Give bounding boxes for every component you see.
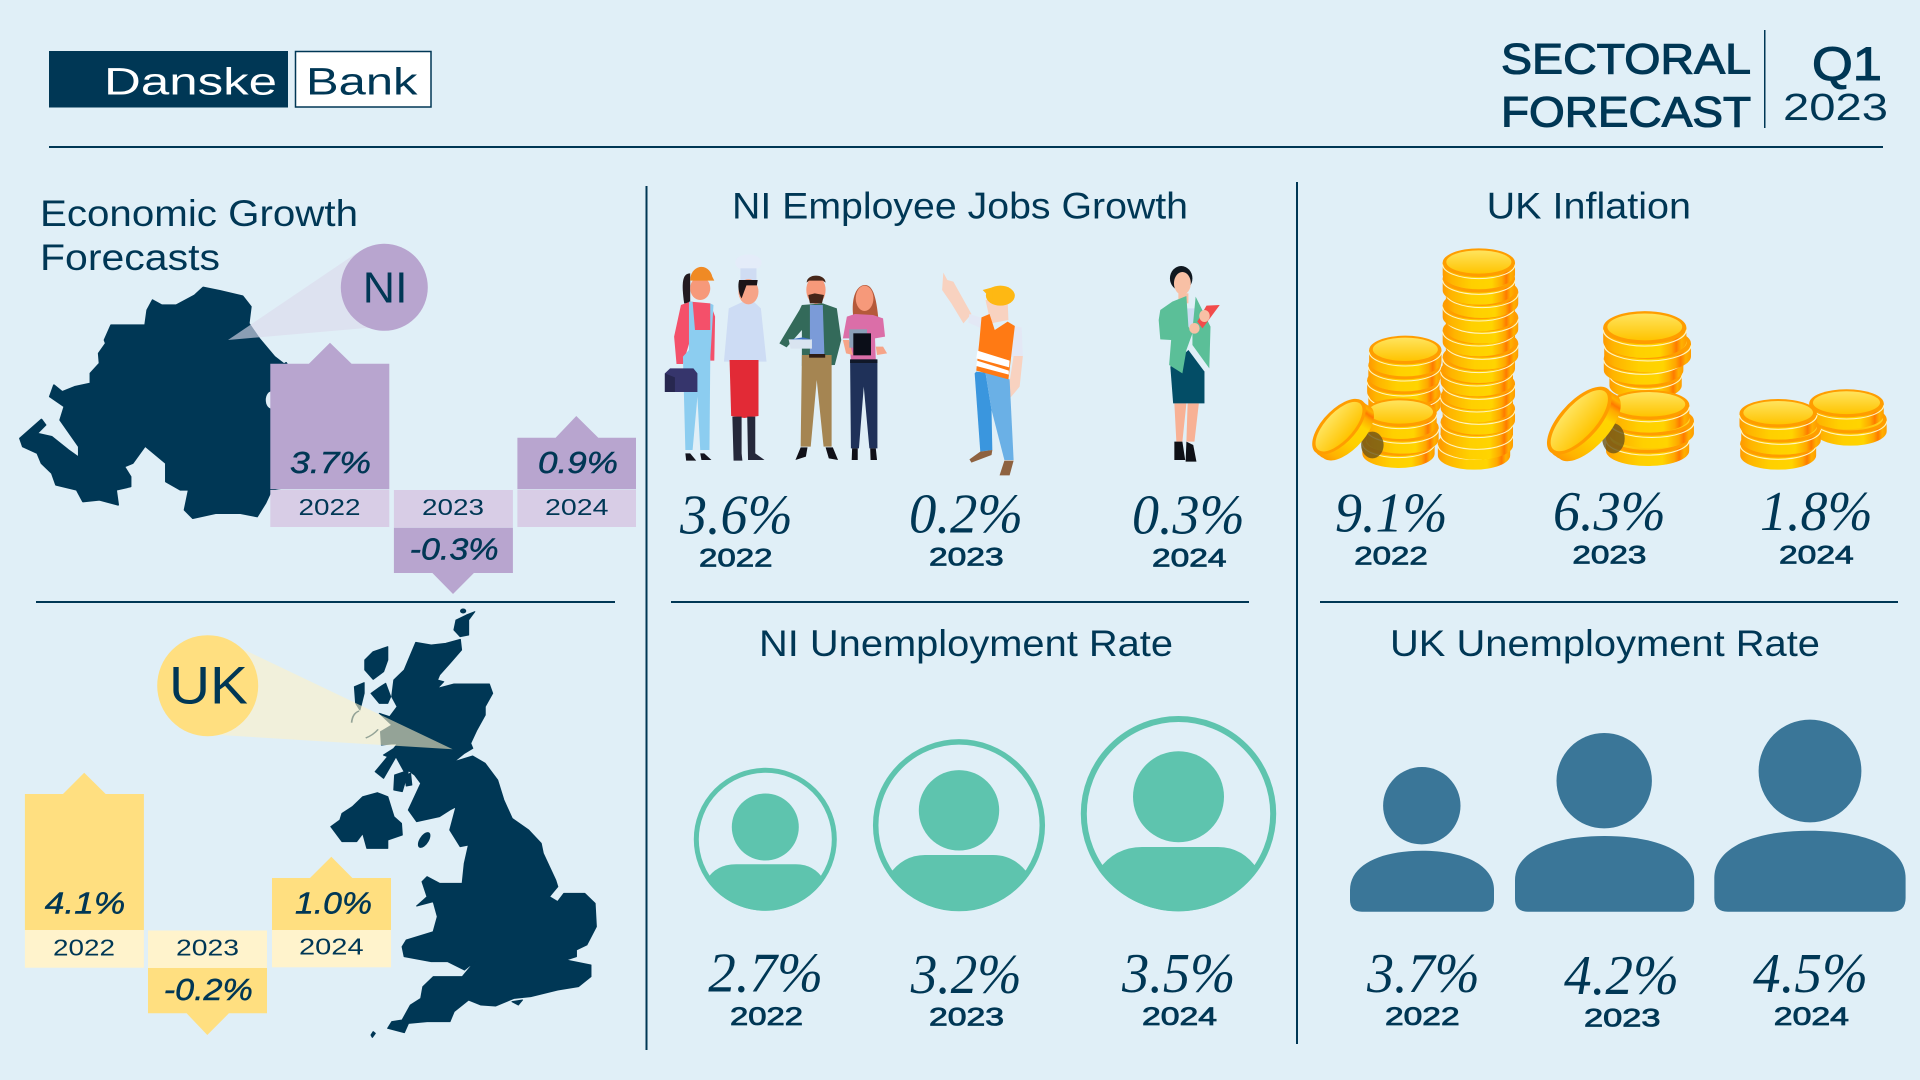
stat: jobs 2023: 0.2% (909, 484, 1023, 546)
title: Sectoral Forecast: FORECAST (1501, 88, 1751, 136)
stat: jobs 2022 (679, 484, 793, 573)
stat: UK unemployment 2023: 4.2% (1564, 945, 1679, 1007)
bar: NI 2022 3.7%: 2022 (298, 494, 360, 520)
stat: NI unemployment 2023 (910, 944, 1022, 1032)
title: Sectoral Forecast (1501, 35, 1751, 136)
stat: inflation 2024: 1.8% (1760, 481, 1873, 543)
stat: NI unemployment 2022: 2022 (730, 1003, 803, 1031)
callout: NI: NI (363, 264, 408, 313)
stat: NI unemployment 2024 (1121, 943, 1235, 1031)
stat: inflation 2024: 2024 (1779, 541, 1854, 569)
stat: UK unemployment 2022: 3.7% (1366, 943, 1480, 1005)
man with books (779, 303, 841, 366)
stat: jobs 2023 (909, 484, 1023, 572)
bar: UK 2024 1.0%: 1.0% (295, 885, 372, 920)
stat: UK unemployment 2022: 2022 (1385, 1003, 1460, 1031)
icon: UK person 2022 (1350, 767, 1494, 912)
stat: inflation 2022: 9.1% (1335, 483, 1448, 545)
stat: NI unemployment 2023: 3.2% (910, 944, 1022, 1006)
stat: UK unemployment 2024: 2024 (1774, 1003, 1849, 1031)
stat: NI unemployment 2024: 2024 (1142, 1003, 1217, 1031)
heading: Economic Growth Forecasts: Forecasts (40, 237, 220, 278)
callout: UK (157, 635, 453, 749)
bar: UK 2022 4.1%: 4.1% (45, 885, 125, 920)
illustration: group of workers (665, 254, 1220, 475)
logo: Danske Bank (49, 51, 431, 108)
logo: Danske Bank: Danske (104, 61, 277, 103)
bar: NI 2024 0.9%: 0.9% (538, 445, 618, 480)
chef (735, 254, 762, 271)
bar: NI 2023 -0.3%: -0.3% (410, 531, 499, 566)
heading: NI Unemployment Rate: NI Unemployment Rate (759, 623, 1173, 664)
stat: NI unemployment 2022: 2.7% (708, 943, 823, 1005)
logo: Danske Bank: Bank (306, 61, 419, 103)
icon: UK person 2024 (1714, 720, 1906, 912)
callout: UK: UK (169, 656, 248, 715)
map: Northern Ireland (20, 287, 290, 518)
stat: jobs 2023: 2023 (929, 544, 1004, 572)
bar: NI 2022 3.7%: 3.7% (290, 445, 371, 480)
stat: jobs 2024 (1132, 484, 1245, 573)
2022 pile (1368, 379, 1441, 420)
stat: UK unemployment 2024 (1753, 943, 1868, 1031)
handy woman (683, 273, 690, 303)
icon: NI person 2022 (696, 770, 834, 911)
heading: Economic Growth Forecasts: Economic Growth (40, 193, 358, 234)
stat: UK unemployment 2023 (1564, 945, 1679, 1033)
bar: UK 2024 1.0% (272, 857, 391, 967)
2023 pile (1609, 359, 1682, 400)
stat: NI unemployment 2023: 2023 (929, 1004, 1004, 1032)
icon: NI person 2024 (1084, 719, 1273, 911)
heading: UK Unemployment Rate: UK Unemployment Rate (1390, 623, 1820, 664)
2024 pile (1814, 405, 1887, 446)
period: Q1 2023 (1783, 37, 1888, 129)
callout: NI (228, 244, 428, 340)
stat: jobs 2024: 2024 (1152, 545, 1227, 573)
stat: UK unemployment 2022 (1366, 943, 1480, 1031)
stat: inflation 2022: 2022 (1354, 542, 1428, 570)
illustration: coin stacks (1301, 248, 1887, 470)
business woman (1170, 266, 1192, 291)
stat: jobs 2022: 2022 (699, 545, 772, 573)
stat: UK unemployment 2024: 4.5% (1753, 943, 1868, 1005)
period: Q1 2023: 2023 (1783, 87, 1888, 129)
stat: NI unemployment 2022 (708, 943, 823, 1031)
stat: inflation 2023: 2023 (1572, 541, 1646, 569)
title: Sectoral Forecast: SECTORAL (1501, 35, 1751, 83)
stat: inflation 2022 (1335, 483, 1448, 570)
period: Q1 2023: Q1 (1812, 37, 1882, 90)
map: United Kingdom (331, 609, 596, 1037)
bar: UK 2022 4.1%: 2022 (53, 934, 115, 960)
stat: inflation 2023 (1553, 481, 1666, 569)
icon: NI person 2023 (876, 742, 1042, 911)
bar: NI 2024 0.9%: 2024 (545, 494, 609, 520)
heading: NI Employee Jobs Growth: NI Employee Jobs Growth (732, 186, 1188, 226)
stat: inflation 2024 (1760, 481, 1873, 569)
heading: Economic Growth Forecasts (40, 193, 358, 278)
bar: UK 2024 1.0%: 2024 (299, 934, 364, 960)
stat: jobs 2024: 0.3% (1132, 484, 1245, 546)
bar: NI 2023 -0.3% (394, 490, 513, 594)
bar: UK 2022 4.1% (25, 773, 144, 968)
stat: inflation 2023: 6.3% (1553, 481, 1666, 543)
stat: jobs 2022: 3.6% (679, 484, 793, 546)
stat: UK unemployment 2023: 2023 (1584, 1005, 1660, 1033)
bar: NI 2024 0.9% (517, 416, 636, 527)
woman with folder (853, 285, 879, 328)
stat: NI unemployment 2024: 3.5% (1121, 943, 1235, 1005)
heading: UK Inflation: UK Inflation (1487, 186, 1691, 226)
bar: NI 2023 -0.3%: 2023 (422, 494, 484, 520)
bar: NI 2022 3.7% (270, 343, 389, 527)
bar: UK 2023 -0.2% (148, 930, 267, 1035)
bar: UK 2023 -0.2%: 2023 (176, 934, 239, 960)
icon: UK person 2023 (1515, 733, 1694, 912)
bar: UK 2023 -0.2%: -0.2% (164, 972, 253, 1007)
construction worker (942, 273, 971, 323)
